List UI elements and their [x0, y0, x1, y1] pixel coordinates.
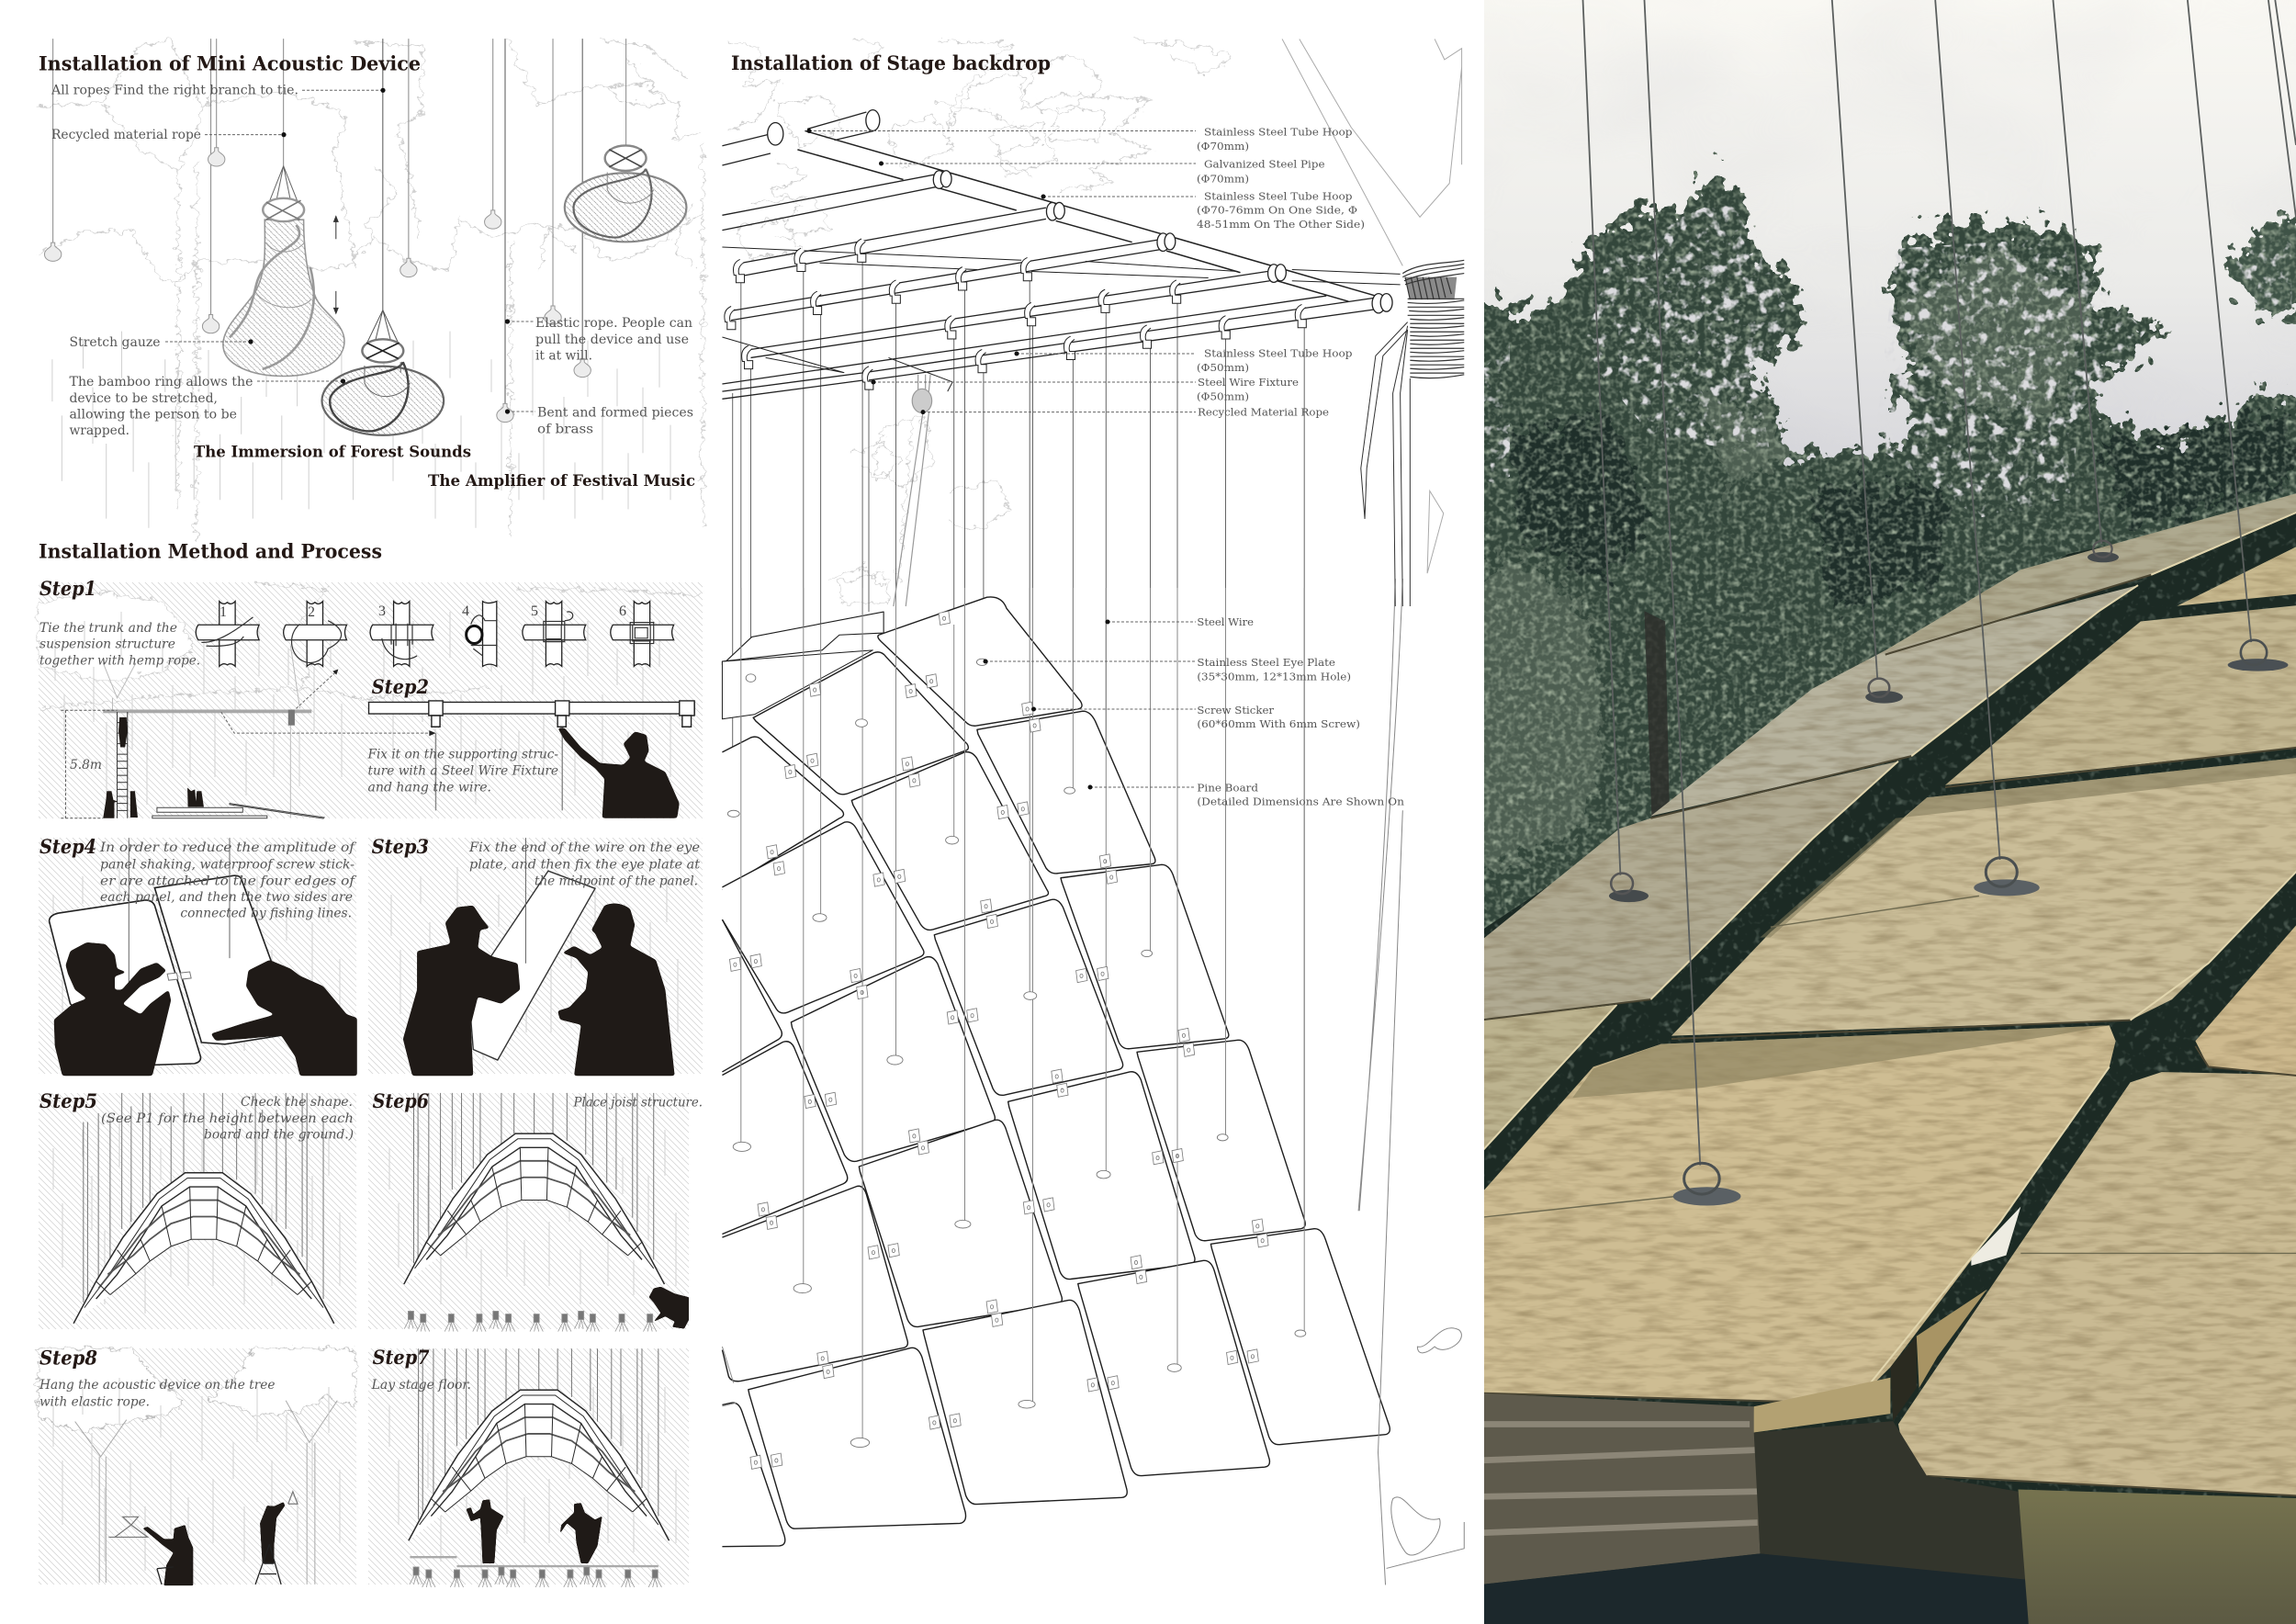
sky [1484, 0, 2296, 514]
step 4 label: Step4 [39, 835, 96, 858]
knot step numbers: 1 [219, 604, 227, 620]
step 6 text: Place joist structure. [573, 1096, 703, 1111]
joist posts [404, 1311, 657, 1332]
step 1 text: suspension structure [39, 637, 175, 652]
step 5 text [101, 1095, 354, 1142]
component labels: (Φ70mm) [1197, 141, 1249, 152]
knot step numbers: 6 [619, 603, 626, 619]
caption: immersion: The Immersion of Forest Sounds [194, 443, 471, 461]
component labels: (Φ50mm) [1197, 391, 1249, 402]
stone base and timber [1479, 1207, 2029, 1624]
panel: step 6 [368, 1093, 702, 1332]
component labels: (60*60mm With 6mm Screw) [1197, 718, 1360, 730]
step 1 label: Step1 [39, 577, 96, 600]
steel wire [524, 838, 526, 964]
annotation texts: device to be stretched, [70, 391, 218, 406]
caption: amplifier: The Amplifier of Festival Music [428, 472, 695, 491]
step 3 label: Step3 [372, 835, 429, 858]
hanging ropes and brass bulbs [44, 39, 626, 423]
annotation texts: wrapped. [70, 423, 129, 438]
step 2 text [366, 748, 558, 795]
stage floor and posts [410, 1557, 661, 1587]
steel wires [1583, 0, 2296, 1166]
annotation texts: All ropes Find the right branch to tie. [51, 83, 298, 97]
component labels: Steel Wire [1197, 616, 1254, 628]
step 4 text: connected by fishing lines. [180, 907, 352, 921]
component labels: Galvanized Steel Pipe [1204, 158, 1324, 171]
tree foliage line art [726, 39, 1462, 603]
panel: step 3 [368, 835, 703, 1076]
panel: mini acoustic device [39, 39, 703, 541]
wires over boards [741, 588, 1304, 1442]
step 8 label: Step8 [39, 1346, 97, 1369]
knot step numbers: 4 [462, 603, 469, 619]
suspended arch structure [403, 1093, 665, 1284]
component labels: Steel Wire Fixture [1198, 377, 1299, 389]
step 3 text [468, 840, 701, 889]
hatched background [39, 1093, 356, 1329]
step 2 pipe with fixtures [369, 701, 694, 810]
component labels: Stainless Steel Tube Hoop [1204, 348, 1352, 360]
hatched background [39, 838, 356, 1074]
step 4 text: In order to reduce the amplitude of [99, 840, 356, 855]
step 5 text: (See P1 for the height between each [101, 1111, 354, 1126]
annotation texts: of brass [537, 423, 593, 437]
eye plates with rings [1609, 541, 2288, 1206]
component labels: Screw Sticker [1197, 705, 1275, 716]
silhouette: worker right [211, 960, 357, 1076]
annotation texts: it at will. [535, 349, 592, 364]
silhouette: worker right [557, 904, 675, 1076]
step 3 text: the midpoint of the panel. [535, 874, 698, 889]
pine board held up [468, 871, 595, 1060]
hanging acoustic devices [108, 1492, 298, 1537]
hatched background [39, 582, 703, 818]
annotation leaders [806, 129, 1196, 790]
silhouette: worker left [54, 942, 171, 1076]
step 4 text: er are attached to the four edges of [100, 874, 356, 889]
step 4 text: each panel, and then the two sides are [100, 890, 353, 905]
pine board panels [722, 579, 1464, 1585]
canopy clearings and trees [39, 1348, 356, 1585]
lifting scene: beam, ladder, figures [61, 669, 435, 818]
panel: stage backdrop [722, 39, 1464, 1585]
knot step numbers [219, 603, 626, 620]
step 1 text [39, 621, 200, 669]
board shapes [1479, 489, 2296, 1496]
component labels: (Φ70mm) [1197, 173, 1249, 185]
step 8 text: with elastic rope. [39, 1394, 150, 1409]
step 5 text: Check the shape. [241, 1095, 353, 1110]
component labels [1197, 126, 1404, 807]
silhouette: worker carrying board [560, 1503, 602, 1563]
step 7 label: Step7 [373, 1346, 430, 1369]
heading: method and process: Installation Method and Process [39, 540, 382, 562]
annotation texts: Bent and formed pieces [537, 406, 693, 421]
component labels: Stainless Steel Eye Plate [1197, 657, 1335, 669]
pine trees [1484, 152, 2296, 929]
component labels: (Φ70-76mm On One Side, Φ [1197, 205, 1357, 217]
step 5 text: board and the ground.) [204, 1127, 354, 1142]
component labels: (Detailed Dimensions Are Shown On [1197, 795, 1404, 808]
step 3 text: plate, and then fix the eye plate at [469, 858, 701, 873]
panel: step 5 [39, 1093, 356, 1329]
hatched background [368, 1093, 689, 1329]
hatched background [39, 1348, 356, 1585]
steel wires and eye plates [733, 258, 1304, 1442]
truss of steel tubes [722, 110, 1401, 399]
silhouette: worker on ladder [260, 1502, 285, 1563]
step 8 text: Hang the acoustic device on the tree [39, 1378, 276, 1393]
suspended arch structure [408, 1348, 670, 1541]
annotation texts: The bamboo ring allows the [70, 375, 253, 389]
rope binding on tree [894, 260, 1464, 606]
forest line-art backdrop [39, 39, 703, 541]
silhouette: worker left [403, 906, 520, 1076]
silhouette: crouching worker [649, 1287, 689, 1329]
title: Installation of Mini Acoustic Device [39, 51, 421, 75]
panel: step 7 [368, 1348, 689, 1587]
panel: render of suspended pine boards [1447, 0, 2296, 1624]
annotation texts: Stretch gauze [70, 335, 161, 350]
knot step numbers: 5 [531, 603, 538, 619]
dark gap under boards [1447, 497, 2296, 1624]
step 5 label: Step5 [39, 1089, 97, 1112]
annotation texts: pull the device and use [535, 333, 689, 347]
component labels: (Φ50mm) [1197, 362, 1249, 374]
dimension text: 5.8m [70, 758, 102, 773]
board shadows and edges [1479, 505, 2296, 1496]
step 2 text: and hang the wire. [367, 780, 491, 795]
step 4 text: panel shaking, waterproof screw stick- [100, 858, 355, 873]
wooden block front right [2018, 1489, 2296, 1624]
annotation leaders [165, 88, 535, 414]
icon: stretched acoustic device [223, 166, 344, 376]
knot step numbers: 2 [308, 604, 315, 620]
step 1 text: together with hemp rope. [39, 654, 200, 669]
component labels: Stainless Steel Tube Hoop [1204, 191, 1352, 203]
knot step numbers: 3 [378, 603, 386, 619]
step 4 text [99, 840, 356, 921]
component labels: Stainless Steel Tube Hoop [1204, 126, 1352, 138]
annotation texts [51, 83, 693, 438]
component labels: Pine Board [1197, 782, 1258, 794]
step 2 text: ture with a Steel Wire Fixture [367, 763, 558, 778]
component labels: Recycled Material Rope [1198, 407, 1329, 419]
hatched background [368, 838, 703, 1074]
hatched background [368, 1348, 689, 1585]
panel: step 4 [39, 835, 357, 1076]
annotation texts: allowing the person to be [70, 408, 237, 423]
component labels: (35*30mm, 12*13mm Hole) [1197, 671, 1351, 682]
step 8 text [39, 1378, 276, 1409]
annotation texts: Elastic rope. People can [535, 316, 692, 331]
step 6 label: Step6 [373, 1089, 429, 1112]
ladder and stool [157, 1544, 281, 1585]
component labels: 48-51mm On The Other Side) [1197, 219, 1365, 231]
silhouette: seated worker [143, 1525, 193, 1585]
pine boards held up [50, 838, 281, 1066]
screw stickers and eye plates [727, 611, 1306, 1469]
icon: compressed acoustic device [322, 310, 444, 435]
rope knot diagrams 1-6 [196, 602, 674, 666]
step 7 text: Lay stage floor. [371, 1378, 471, 1393]
step 1 text: Tie the trunk and the [39, 621, 177, 636]
panel: step 8 [39, 1346, 356, 1585]
silhouette: worker fixing wire [557, 727, 680, 818]
step 2 text: Fix it on the supporting struc- [366, 748, 558, 762]
icon: relaxed acoustic device [565, 145, 686, 242]
suspended arch structure [73, 1093, 334, 1325]
step 2 label: Step2 [372, 675, 429, 698]
annotation texts: Recycled material rope [51, 128, 201, 142]
silhouette: worker with drill [467, 1499, 503, 1563]
tree canopy blob and forest lines [39, 582, 703, 818]
title: Installation of Stage backdrop [731, 51, 1051, 74]
panel: step 1 and 2 [39, 577, 703, 818]
step 3 text: Fix the end of the wire on the eye [468, 840, 700, 855]
